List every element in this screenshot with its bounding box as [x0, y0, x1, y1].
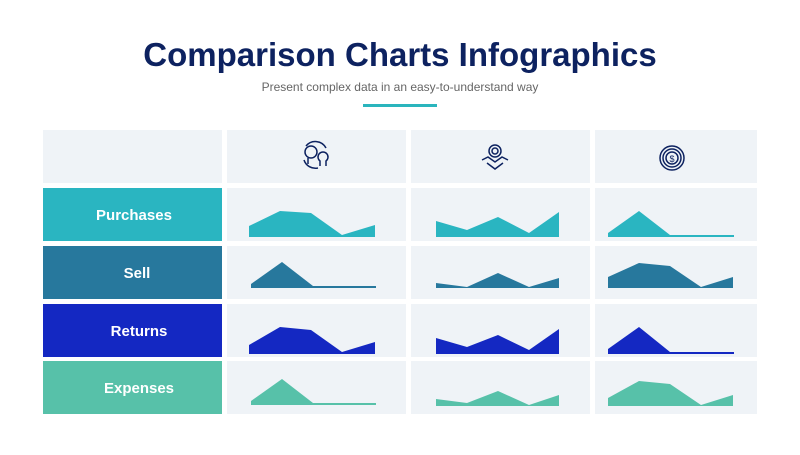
charts: Purchases: [249, 211, 734, 237]
row label: Purchases: Purchases: [96, 207, 172, 224]
icon: coin target: $: [669, 154, 675, 164]
title: Comparison Charts Infographics: [143, 36, 657, 73]
charts: Expenses: [251, 379, 733, 406]
table grid: [43, 130, 757, 414]
row label: Expenses: [43, 361, 222, 414]
accent line: [363, 104, 437, 107]
subtitle: Present complex data in an easy-to-understand way: [262, 80, 538, 94]
row label: Returns: Returns: [111, 323, 167, 340]
row label: Sell: Sell: [124, 265, 150, 282]
icon: handshake gear: [482, 145, 508, 169]
row label: Expenses: Expenses: [104, 380, 174, 397]
charts: Sell: [251, 262, 733, 288]
row label: Purchases: [43, 188, 222, 241]
icon: coin target: [660, 146, 684, 170]
charts: Returns: [249, 327, 734, 354]
icon: people: [304, 142, 328, 168]
row label: Returns: [43, 304, 222, 357]
row label: Sell: [43, 246, 222, 299]
